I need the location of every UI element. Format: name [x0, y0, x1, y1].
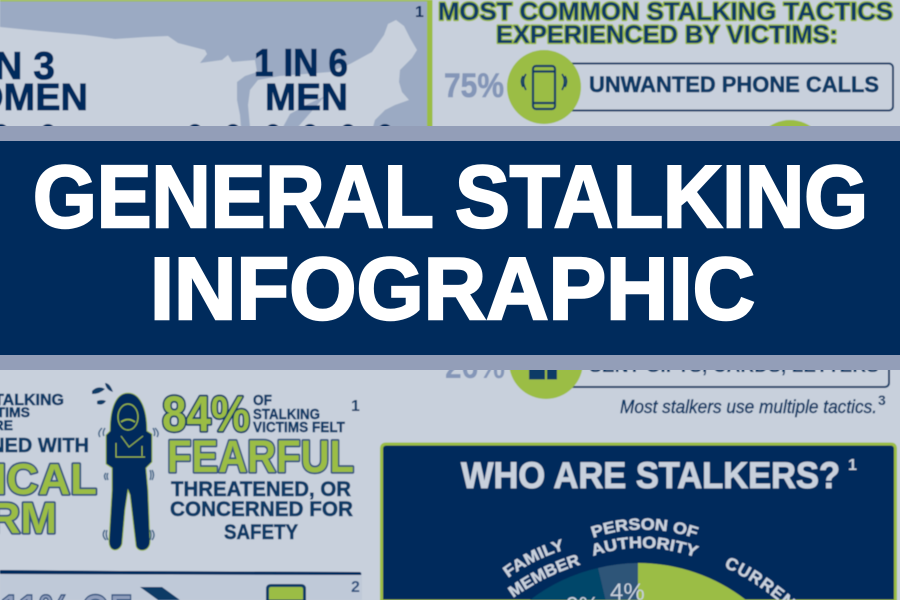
note: multiple tactics: Most stalkers use multiple tactics.	[620, 397, 877, 417]
tactic row: sent gifts: 26%	[445, 348, 505, 386]
banner title: INFOGRAPHIC	[150, 239, 755, 338]
next tactic circle	[753, 120, 827, 194]
of stalking victims felt: OF	[253, 393, 272, 409]
pie label: person of authority: AUTHORITY	[592, 536, 700, 557]
green divider	[427, 0, 432, 127]
panel: tactics	[438, 0, 893, 194]
panel: prevalence map	[0, 0, 427, 138]
of stalking victims felt: STALKING	[253, 407, 320, 423]
footnote: 2	[351, 579, 360, 596]
statistic: 1 in 3 women	[0, 45, 88, 119]
tactic row: unwanted phone calls: 75%	[444, 67, 504, 105]
arrow	[140, 587, 180, 600]
note: multiple tactics: 3	[878, 392, 886, 408]
trembling marks	[99, 428, 158, 540]
person icons row	[0, 124, 392, 138]
panel: physical harm statistic	[0, 392, 97, 543]
of stalking victims felt: VICTIMS FELT	[253, 420, 345, 436]
icon: phone	[522, 66, 566, 109]
face	[118, 404, 138, 430]
lower left panel	[0, 570, 362, 600]
pie label: family member: MEMBER	[506, 554, 582, 598]
tactic row: sent gifts: SENT GIFTS, CARDS, LETTERS	[589, 355, 879, 377]
icon: fearful figure	[92, 383, 158, 550]
tactic row: unwanted phone calls	[444, 50, 893, 124]
banner title	[33, 147, 868, 338]
threatened or concerned	[170, 478, 353, 544]
statistic: 1 in 6 men: 1 IN 6	[254, 42, 348, 85]
panel: fear statistic	[162, 386, 360, 544]
statistic: 1 in 6 men	[254, 42, 348, 119]
statistic: 1 in 6 men: MEN	[265, 77, 348, 119]
pie chart	[530, 563, 746, 600]
number box	[268, 586, 304, 600]
panel: who are stalkers	[380, 442, 898, 600]
panel heading: WHO ARE STALKERS?	[461, 455, 840, 496]
banner strip	[0, 126, 900, 370]
threatened or concerned: THREATENED, OR	[171, 478, 351, 501]
pie label: person of authority: PERSON OF	[590, 517, 700, 538]
footnote: 1	[848, 457, 857, 474]
tactic row: unwanted phone calls: UNWANTED PHONE CALLS	[589, 72, 879, 97]
of stalking victims felt	[253, 393, 345, 436]
84 percent: 84%	[162, 386, 250, 442]
pie label: person of authority	[590, 517, 700, 557]
tactic row: sent gifts	[445, 325, 889, 399]
tactics heading	[438, 0, 893, 49]
footnote: 1	[351, 398, 360, 415]
map of the United States	[0, 20, 417, 127]
icon: gift	[529, 360, 557, 380]
sweat drops	[92, 383, 113, 405]
tactics heading: EXPERIENCED BY VICTIMS:	[496, 21, 838, 49]
threatened or concerned: SAFETY	[224, 521, 298, 544]
footnote 1: 1	[415, 4, 424, 21]
pie label: family member: FAMILY	[502, 538, 562, 578]
fearful: FEARFUL	[167, 431, 354, 482]
crossed arms	[116, 436, 145, 457]
threatened or concerned: CONCERNED FOR	[170, 498, 353, 521]
